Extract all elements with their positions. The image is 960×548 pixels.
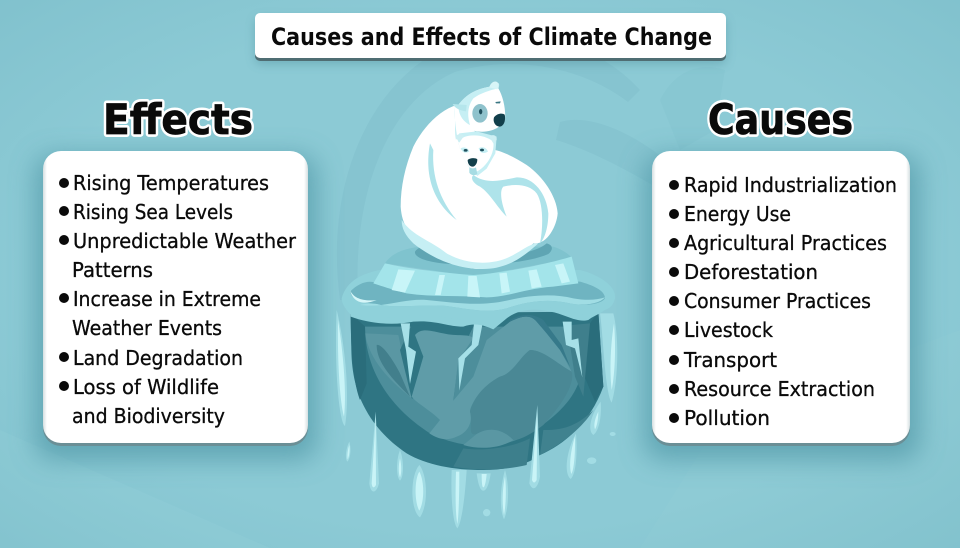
panel: effects xyxy=(43,151,308,446)
land xyxy=(412,317,572,439)
causes list: Pollution xyxy=(684,406,770,430)
ice cap lower edge xyxy=(350,290,612,329)
effects list: Loss of Wildlife xyxy=(73,375,219,399)
causes list: Livestock xyxy=(684,318,773,342)
effects list: Rising Sea Levels xyxy=(73,200,233,224)
causes list: Deforestation xyxy=(684,260,818,284)
panel shadows xyxy=(35,155,920,460)
panel: causes xyxy=(652,151,910,446)
mother bear body xyxy=(401,105,558,269)
causes list: Energy Use xyxy=(684,202,791,226)
effects list: and Biodiversity xyxy=(72,404,225,428)
effects list: Unpredictable Weather xyxy=(73,229,297,253)
globe icicles xyxy=(529,405,540,488)
causes list: Consumer Practices xyxy=(684,289,871,313)
floe xyxy=(385,247,572,277)
ice cap and floe xyxy=(342,243,615,322)
causes list: Transport xyxy=(683,348,777,372)
effects list: Weather Events xyxy=(72,316,222,340)
heading: Effects: Effects xyxy=(103,95,253,144)
mother bear head xyxy=(458,83,505,132)
causes list xyxy=(669,173,897,430)
heading: Effects: Effects xyxy=(103,95,253,144)
causes list: Rapid Industrialization xyxy=(684,173,897,197)
causes list: Agricultural Practices xyxy=(684,231,887,255)
effects list xyxy=(59,171,297,428)
cub xyxy=(458,135,494,172)
mother bear and cub xyxy=(401,82,558,269)
effects list: Patterns xyxy=(72,258,153,282)
title xyxy=(255,13,726,64)
heading: Causes: Causes xyxy=(708,95,853,144)
globe xyxy=(350,290,612,491)
causes list: Resource Extraction xyxy=(684,377,875,401)
icicles xyxy=(336,310,617,528)
icon: polar bears on melting globe xyxy=(336,82,617,528)
effects list: Land Degradation xyxy=(73,346,243,370)
effects list: Increase in Extreme xyxy=(73,287,261,311)
effects list: Rising Temperatures xyxy=(73,171,269,195)
cracks xyxy=(401,323,416,384)
heading: Causes: Causes xyxy=(708,95,853,144)
title: Causes and Effects of Climate Change xyxy=(271,23,712,51)
